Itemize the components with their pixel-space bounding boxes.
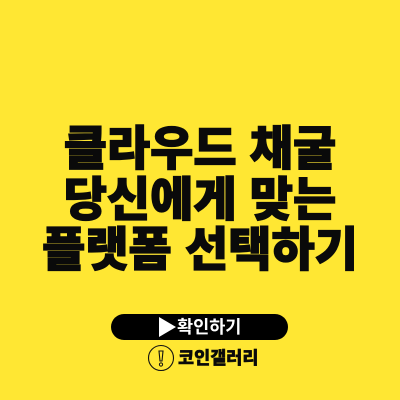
title: 플랫폼 선택하기: [42, 211, 358, 280]
title: 클라우드 채굴: [64, 110, 336, 179]
button label: 확인하기: [177, 314, 241, 339]
brand name: 코인갤러리: [178, 345, 258, 370]
button: confirm: [111, 314, 288, 340]
title: [42, 110, 358, 280]
icon: exclamation circle: [148, 345, 174, 371]
icon: play triangle: [159, 317, 176, 337]
title: 당신에게 맞는: [64, 161, 336, 230]
